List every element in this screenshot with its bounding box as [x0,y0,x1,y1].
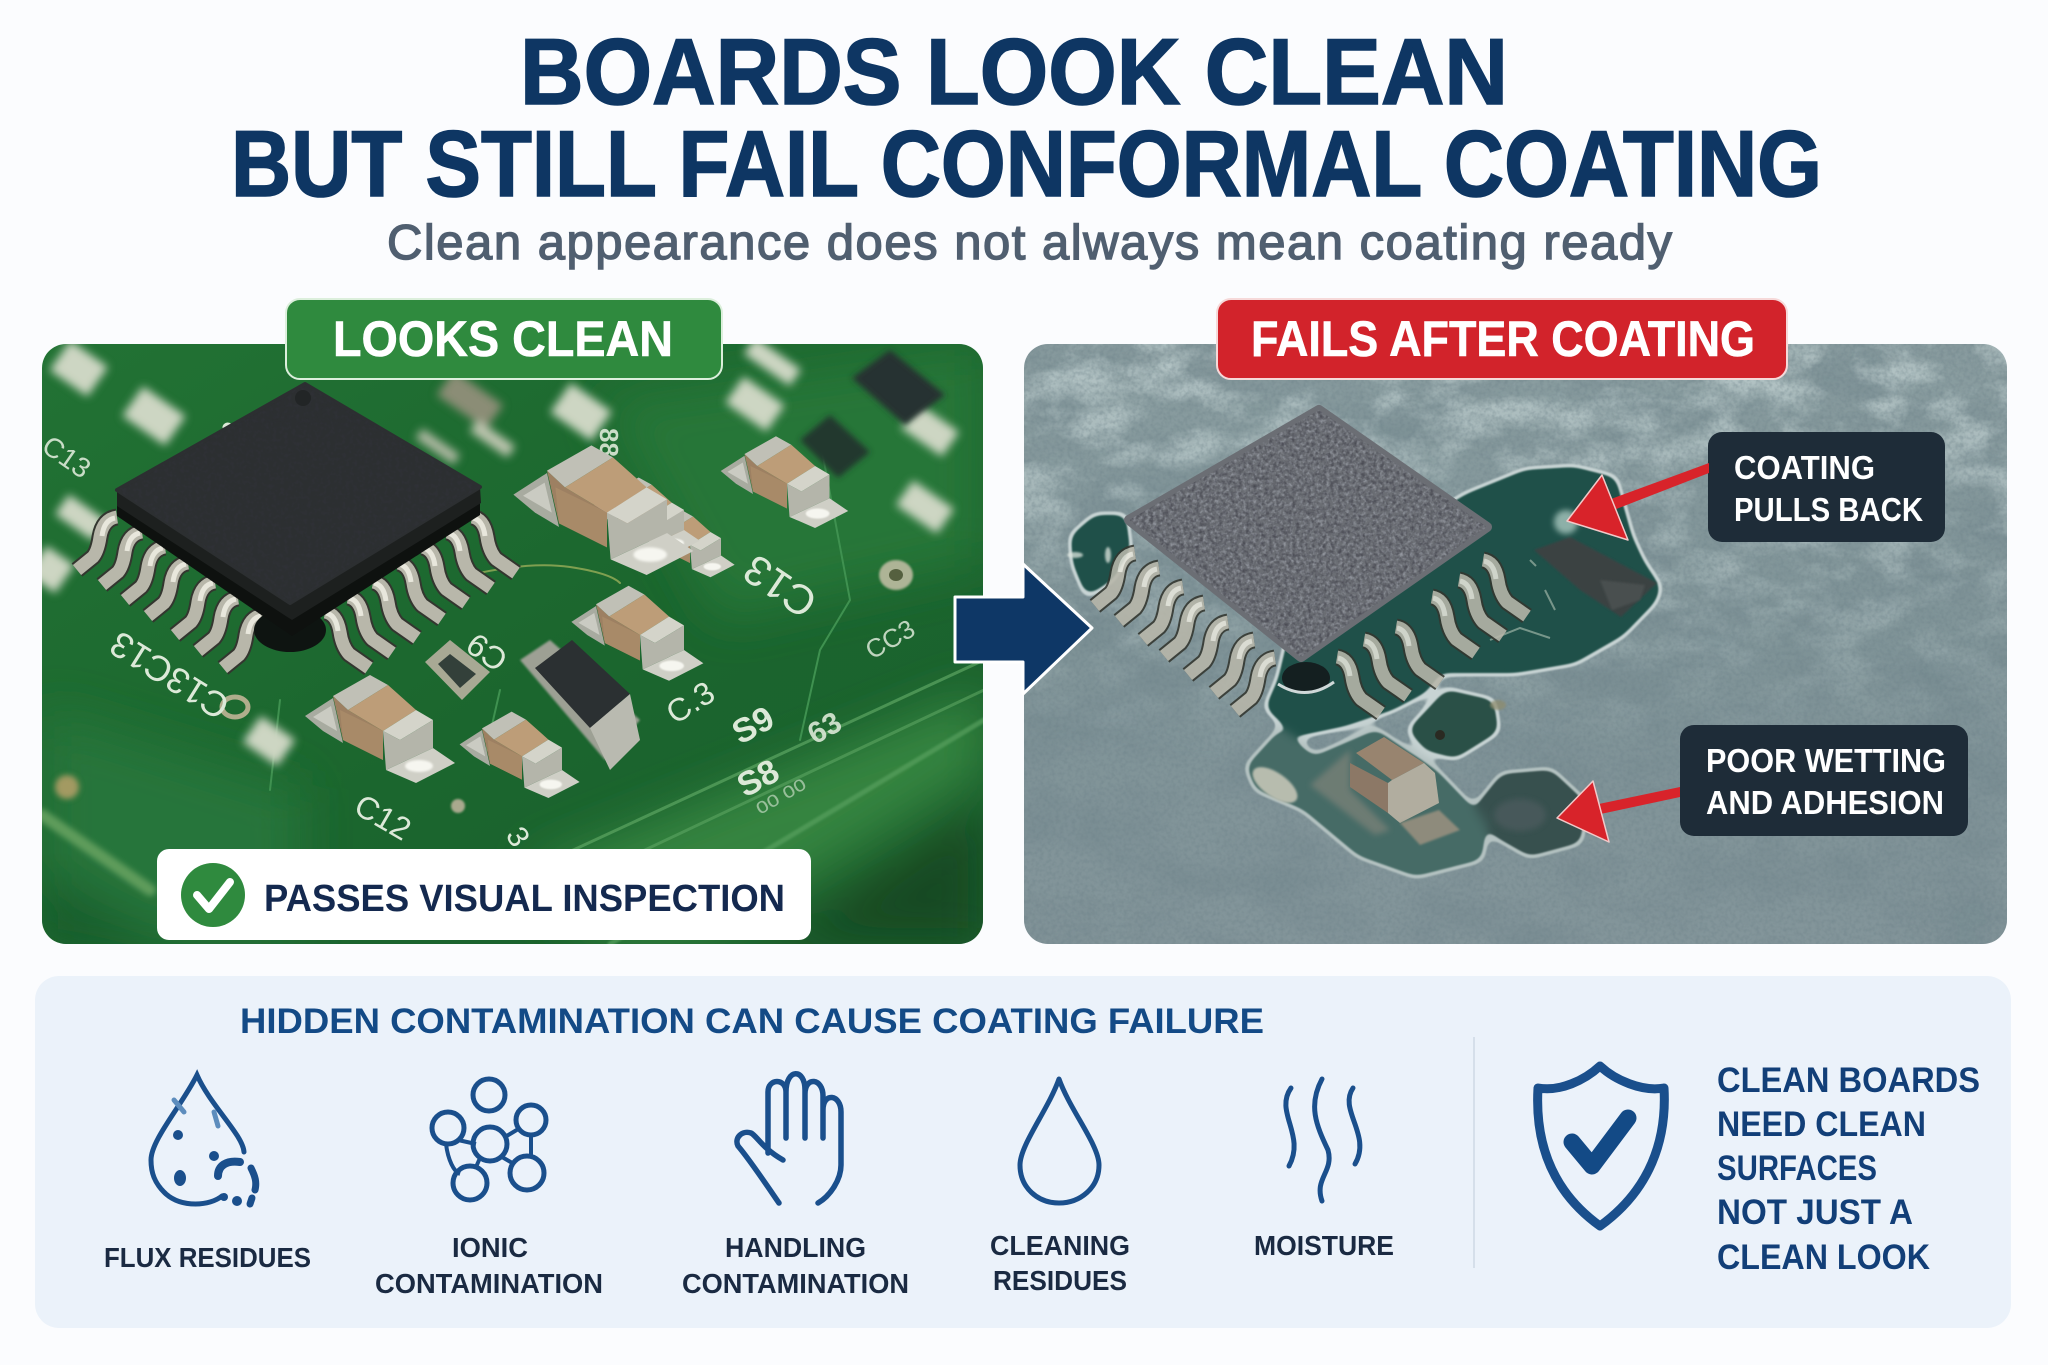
badge: looks clean: LOOKS CLEAN [333,311,673,367]
arrow: clean to failed [955,564,1092,694]
silkscreen markings: C3 [211,415,258,461]
text: takeaway: SURFACES [1717,1149,1877,1188]
arrow: poor wetting [1557,781,1680,842]
coated chip with leads [1095,410,1527,713]
icon: flux residue drop [151,1075,256,1206]
badge: fails after coating: FAILS AFTER COATING [1251,311,1755,367]
silkscreen markings: C13 [735,545,825,628]
label: ionic contamination [375,1232,603,1299]
label: flux residues: FLUX RESIDUES [104,1242,311,1273]
silkscreen markings: 88 [594,428,624,457]
text: takeaway [1717,1061,1980,1277]
callout: poor wetting and adhesion: AND ADHESION [1706,784,1944,821]
icon: cleaning drop [1020,1079,1099,1203]
panel: hidden contamination [35,976,2011,1328]
label: handling contamination: CONTAMINATION [682,1268,909,1299]
callout: passes visual inspection: PASSES VISUAL INSPECTION [264,878,785,920]
out of focus parts at the top of the board [27,337,959,766]
silkscreen markings: S9 [726,699,780,752]
silkscreen markings: C12 [348,787,417,847]
title: BOARDS LOOK CLEAN [520,19,1508,124]
label: ionic contamination: CONTAMINATION [375,1268,603,1299]
label: cleaning residues: RESIDUES [993,1265,1127,1296]
badge: looks clean [286,299,722,379]
silkscreen markings: C.3 [660,674,721,731]
subtitle: Clean appearance does not always mean coating ready [387,216,1672,270]
exposed dark green board areas [1074,470,1657,873]
text: takeaway: NEED CLEAN [1717,1105,1926,1144]
callout: poor wetting and adhesion: POOR WETTING [1706,742,1946,779]
label: ionic contamination: IONIC [452,1232,528,1263]
heading: HIDDEN CONTAMINATION CAN CAUSE COATING FAILURE [240,1002,1264,1041]
label: moisture: MOISTURE [1254,1230,1394,1261]
callout: coating pulls back: COATING [1734,449,1875,486]
label: cleaning residues: CLEANING [990,1230,1130,1261]
icon: green check [181,863,245,927]
text: takeaway: NOT JUST A [1717,1193,1913,1232]
title: BUT STILL FAIL CONFORMAL COATING [231,111,1822,216]
panel: clean-looking green circuit board photo [27,337,984,944]
panel: failed coating photo [1024,344,2007,944]
coating halo around exposed areas [1074,470,1657,873]
silkscreen markings: S8 [731,752,785,805]
ceramic capacitors [305,436,848,798]
arrow: coating pulls back [1567,463,1709,540]
title [231,19,1822,216]
chip with leads [77,384,516,668]
badge: fails after coating [1217,299,1787,379]
label: handling contamination: HANDLING [725,1232,866,1263]
text: takeaway: CLEAN LOOK [1717,1238,1930,1277]
coated capacitor [1247,737,1460,845]
icon: ionic molecule [432,1079,546,1200]
silkscreen markings [37,415,920,853]
text: takeaway: CLEAN BOARDS [1717,1061,1980,1100]
icon: shield with check [1538,1066,1664,1226]
silkscreen markings: 63 [802,706,847,751]
silkscreen markings: CC3 [860,613,920,665]
silkscreen markings: C13C13 [102,623,236,728]
silkscreen markings: oo oo [750,770,810,819]
silkscreen markings: C9 [460,626,514,679]
small dark component [425,640,640,770]
label: handling contamination [682,1232,909,1299]
callout: coating pulls back [1708,432,1945,542]
callout: poor wetting and adhesion [1680,725,1968,836]
silkscreen markings: C13 [37,430,96,484]
silkscreen markings: 3 [499,821,536,853]
icon: moisture waves [1286,1079,1360,1201]
callout: coating pulls back: PULLS BACK [1734,491,1923,528]
icon: hand [737,1074,841,1203]
callout: passes visual inspection [157,849,811,940]
label: cleaning residues [990,1230,1130,1296]
